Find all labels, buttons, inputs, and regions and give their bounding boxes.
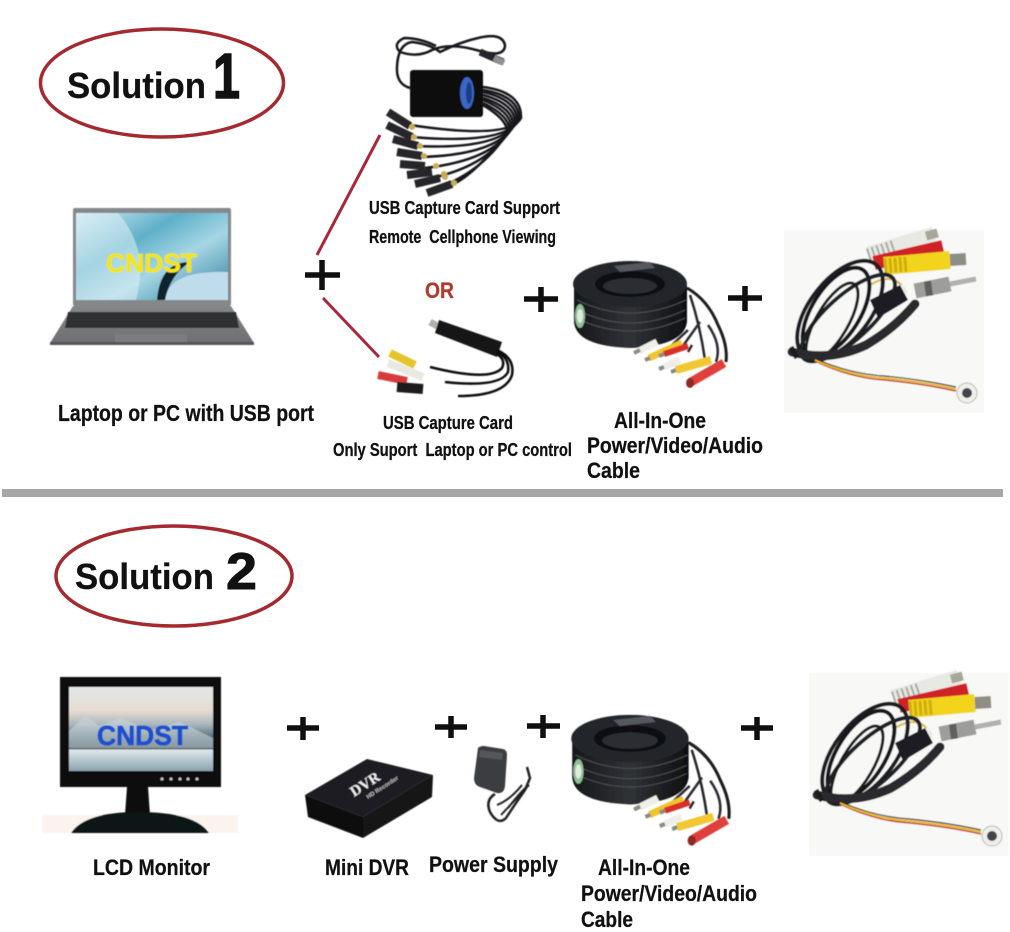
heading: Solution 2 badge: 2 xyxy=(226,543,257,601)
label: all-in-one cable xyxy=(587,408,763,483)
icon: LCD monitor xyxy=(42,677,238,833)
icon: power supply xyxy=(474,746,530,821)
plus sign xyxy=(435,716,467,738)
label: all-in-one cable: All-In-One xyxy=(598,855,690,880)
icon: mini DVR xyxy=(305,759,433,838)
label: all-in-one cable: Power/Video/Audio xyxy=(587,433,763,458)
plus sign xyxy=(741,717,773,740)
section divider xyxy=(2,489,1003,497)
icon: USB capture card xyxy=(378,320,512,396)
arrow: red line to USB capture card xyxy=(323,298,379,357)
label: OR: OR xyxy=(425,278,454,303)
icon: button camera kit xyxy=(781,229,984,413)
label: all-in-one cable: Cable xyxy=(587,458,640,483)
icon: mini DVR: HD Recorder xyxy=(366,775,400,801)
plus sign xyxy=(287,717,319,740)
heading: Solution 1 badge: 1 xyxy=(213,40,240,112)
icon: power video audio cable coil xyxy=(573,261,726,388)
icon: mini DVR: DVR xyxy=(347,769,384,800)
icon: button camera kit xyxy=(806,672,1009,856)
arrow: red line to 8-channel card xyxy=(317,135,380,255)
label: USB capture card with remote viewing: USB Capture Card Support xyxy=(369,198,560,218)
label: LCD monitor: LCD Monitor xyxy=(93,855,210,880)
label: USB capture card: USB Capture Card xyxy=(383,413,513,433)
label: all-in-one cable: Cable xyxy=(581,907,633,932)
label: all-in-one cable xyxy=(581,855,757,932)
plus sign xyxy=(524,287,558,312)
icon: laptop xyxy=(50,208,254,345)
label: laptop: Laptop or PC with USB port xyxy=(58,400,314,426)
label: USB capture card with remote viewing xyxy=(369,198,560,247)
icon: LCD monitor: CNDST xyxy=(97,720,188,751)
icon: power video audio cable coil xyxy=(571,715,729,846)
plus sign xyxy=(527,715,560,738)
label: all-in-one cable: All-In-One xyxy=(614,408,706,433)
heading: Solution 1 badge xyxy=(40,29,284,137)
label: all-in-one cable: Power/Video/Audio xyxy=(581,881,757,906)
heading: Solution 1 badge: Solution xyxy=(67,65,206,106)
icon: laptop: CNDST xyxy=(106,248,197,278)
heading: Solution 2 badge xyxy=(56,526,292,626)
label: USB capture card with remote viewing: Remote Cellphone Viewing xyxy=(369,227,556,247)
plus sign xyxy=(305,260,340,290)
plus sign xyxy=(728,286,762,311)
label: USB capture card xyxy=(333,413,572,460)
label: power supply: Power Supply xyxy=(429,852,559,877)
label: mini DVR: Mini DVR xyxy=(325,855,409,880)
heading: Solution 2 badge: Solution xyxy=(75,556,214,597)
icon: 8-channel USB capture card xyxy=(387,36,521,193)
label: USB capture card: Only Suport Laptop or PC control xyxy=(333,440,572,460)
